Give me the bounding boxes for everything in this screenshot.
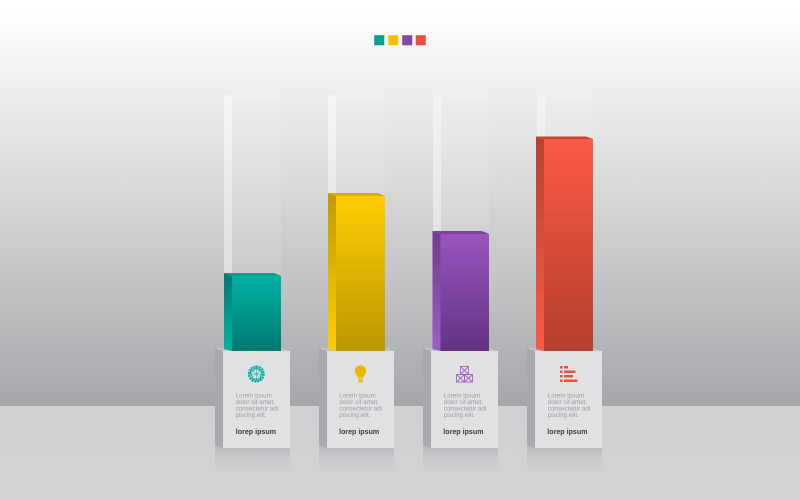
- text block 1: [236, 392, 278, 419]
- reflection 4: [527, 445, 602, 478]
- legend squares: [374, 35, 426, 46]
- glass tube 1: [224, 95, 281, 350]
- column 2: yellow: [319, 95, 394, 478]
- bar 4: [536, 136, 593, 351]
- column 4: red: [527, 95, 602, 478]
- label 2: lorep ipsum: [339, 428, 379, 436]
- text block 1: piscing elit.: [236, 412, 267, 419]
- text block 4: [548, 392, 590, 419]
- icon: stacked boxes: [456, 366, 472, 382]
- pedestal 3: [423, 348, 498, 448]
- glass tube 3: [433, 95, 489, 350]
- glass tube 2: [328, 95, 385, 350]
- glass tube 4: [537, 95, 593, 350]
- text block 2: piscing elit.: [339, 412, 371, 419]
- text block 4: dolor sit amet,: [548, 399, 587, 406]
- label 1: lorep ipsum: [236, 428, 276, 436]
- column 3: purple: [423, 95, 498, 478]
- text block 2: Lorem ipsum: [339, 392, 376, 400]
- pedestal 2: [319, 348, 394, 448]
- text block 3: consectetur adi: [444, 406, 486, 412]
- text block 1: dolor sit amet,: [236, 399, 275, 406]
- text block 1: consectetur adi: [236, 406, 278, 412]
- icon: light bulb: [355, 366, 366, 382]
- column 1: teal: [215, 95, 290, 478]
- pedestal 4: [527, 348, 602, 448]
- text block 3: [444, 392, 486, 419]
- reflection 2: [319, 445, 394, 478]
- bar 3: [432, 231, 489, 351]
- bar 2: [328, 193, 385, 351]
- icon: list: [560, 366, 578, 382]
- text block 2: consectetur adi: [339, 406, 382, 412]
- bar 1: [224, 273, 281, 351]
- label 3: lorep ipsum: [443, 428, 484, 436]
- text block 4: piscing elit.: [548, 412, 579, 419]
- floor: [0, 406, 800, 500]
- text block 1: Lorem ipsum: [236, 392, 272, 400]
- text block 3: dolor sit amet,: [444, 399, 483, 406]
- reflection 3: [423, 445, 498, 478]
- pedestal 1: [215, 348, 290, 448]
- text block 3: Lorem ipsum: [444, 392, 480, 400]
- text block 2: [339, 392, 382, 419]
- text block 4: consectetur adi: [548, 406, 590, 412]
- text block 2: dolor sit amet,: [339, 399, 379, 406]
- reflection 1: [215, 445, 290, 478]
- label 4: lorep ipsum: [547, 428, 588, 436]
- icon: gear wheel: [249, 366, 264, 382]
- text block 3: piscing elit.: [444, 412, 475, 419]
- text block 4: Lorem ipsum: [548, 392, 584, 400]
